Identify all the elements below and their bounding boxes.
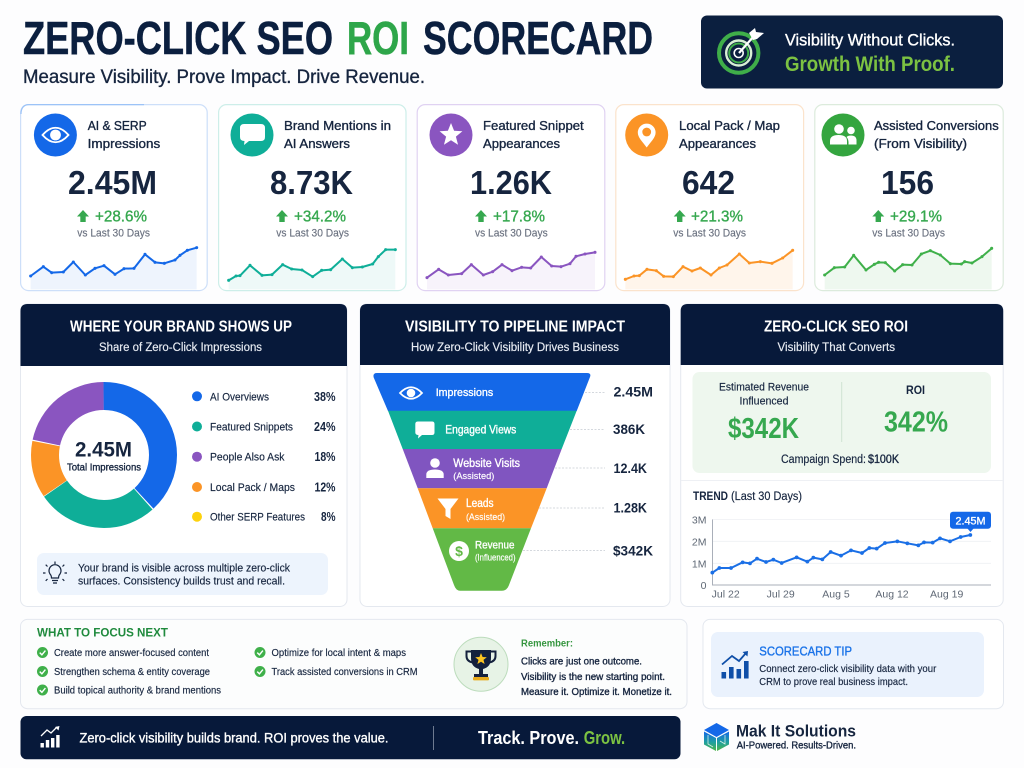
trend line chart: 0	[701, 580, 707, 592]
panel: scorecard tip	[703, 619, 1004, 709]
ROI summary box: 342%	[884, 407, 948, 439]
panel: brand mentions card: 8.73K	[270, 164, 353, 201]
banner: visibility without clicks: Visibility Without Clicks.	[785, 31, 955, 50]
panel: local pack card: Local Pack / Map	[679, 118, 780, 133]
panel: scorecard tip: SCORECARD TIP	[759, 643, 852, 658]
panel: local pack card	[616, 105, 804, 291]
icon: star	[430, 114, 472, 156]
callout: consistency note	[37, 553, 328, 595]
legend: Local Pack / Maps	[210, 482, 295, 494]
title: ROI	[347, 12, 409, 64]
icon: people	[822, 114, 864, 156]
ROI summary box: Estimated Revenue	[719, 382, 809, 394]
panel: AI and SERP impressions card: vs Last 30 Days	[77, 228, 150, 240]
funnel stage: website visits	[403, 449, 562, 488]
funnel stage: engaged views	[388, 411, 577, 449]
icon: chat bubble	[230, 114, 274, 156]
checklist: Create more answer-focused content	[54, 648, 209, 659]
title: ZERO-CLICK SEO	[23, 12, 333, 64]
legend	[192, 390, 336, 524]
panel: brand mentions card: +34.2%	[294, 209, 346, 226]
logo: Mak It Solutions: AI-Powered. Results-Driven.	[737, 740, 856, 752]
panel: local pack card: 642	[682, 164, 735, 201]
icon: map pin	[625, 114, 668, 156]
panel header	[360, 304, 670, 365]
callout: consistency note: surfaces. Consistency builds trust and recall.	[78, 576, 285, 588]
trend heading: TREND	[693, 491, 728, 503]
funnel stage: revenue	[433, 528, 531, 591]
icon: target with arrow	[719, 28, 764, 73]
panel: local pack card: +21.3%	[691, 209, 743, 226]
subtitle: Measure Visibility. Prove Impact. Drive Revenue.	[23, 66, 425, 88]
funnel stage: leads	[418, 488, 547, 528]
icon: bars and trend	[40, 726, 60, 748]
panel: local pack card: Appearances	[679, 136, 756, 151]
callout: 2.45M: 2.45M	[956, 515, 986, 527]
panel: assisted conversions card: vs Last 30 Days	[872, 228, 945, 240]
panel header: ZERO-CLICK SEO ROI	[764, 319, 908, 336]
panel: featured snippet card: Featured Snippet	[483, 118, 584, 133]
panel: assisted conversions card: 156	[881, 164, 934, 201]
callout: consistency note: Your brand is visible across multiple zero-click	[78, 563, 290, 575]
panel: scorecard tip: Connect zero-click visibility data with your	[759, 663, 937, 675]
panel: brand mentions card: vs Last 30 Days	[276, 228, 349, 240]
funnel chart	[373, 373, 590, 591]
funnel values: 386K	[613, 421, 645, 437]
funnel stage: leads: (Assisted)	[466, 512, 505, 523]
panel: brand mentions card: Brand Mentions in	[284, 118, 391, 133]
panel: where your brand shows up	[20, 304, 347, 606]
remember note: Remember:	[521, 639, 573, 650]
callout: 2.45M	[950, 512, 991, 532]
panel header: Visibility That Converts	[778, 342, 895, 354]
funnel stage: revenue: $	[455, 543, 463, 559]
funnel stage: website visits: (Assisted)	[453, 471, 494, 482]
legend: 24%	[314, 420, 336, 434]
panel header	[20, 304, 347, 366]
panel header	[681, 304, 1003, 365]
ROI summary box: ROI	[906, 385, 925, 397]
footer banner: Zero-click visibility builds brand. ROI proves the value.	[80, 730, 388, 745]
remember note: Measure it. Optimize it. Monetize it.	[521, 687, 672, 698]
title: SCORECARD	[423, 12, 653, 64]
panel: AI and SERP impressions card: AI & SERP	[88, 118, 147, 133]
remember note: Clicks are just one outcome.	[521, 657, 642, 668]
icon: light bulb	[43, 562, 67, 583]
panel header: VISIBILITY TO PIPELINE IMPACT	[405, 319, 625, 336]
panel: featured snippet card: +17.8%	[493, 209, 545, 226]
sparkline	[625, 250, 793, 289]
logo: Mak It Solutions	[704, 722, 856, 752]
legend: Featured Snippets	[210, 422, 293, 434]
trend line chart: Aug 19	[930, 589, 963, 601]
panel header: How Zero-Click Visibility Drives Business	[411, 342, 619, 354]
trend line chart: Jul 29	[767, 589, 795, 601]
icon: trophy	[454, 637, 508, 691]
funnel values: 12.4K	[614, 460, 647, 476]
donut chart: 2.45M	[75, 439, 132, 462]
panel header: Share of Zero-Click Impressions	[99, 342, 262, 354]
legend: Other SERP Features	[210, 512, 305, 524]
funnel stage: impressions	[373, 373, 590, 411]
checklist: Track assisted conversions in CRM	[272, 667, 418, 678]
trend line chart: 1M	[692, 558, 706, 570]
trend line chart: Aug 12	[875, 589, 909, 601]
panel: AI and SERP impressions card: 2.45M	[68, 164, 157, 201]
sparkline	[31, 248, 197, 289]
trend heading: (Last 30 Days)	[731, 491, 802, 503]
trend line chart: Aug 5	[822, 589, 850, 601]
donut chart: Total Impressions	[67, 462, 141, 474]
panel: brand mentions card: AI Answers	[284, 136, 351, 151]
funnel values	[523, 384, 653, 558]
trend line chart: 3M	[692, 514, 706, 526]
banner: visibility without clicks: Growth With Proof.	[785, 53, 955, 76]
funnel stage: website visits: Website Visits	[453, 458, 520, 470]
funnel stage: revenue: (Influenced)	[475, 553, 516, 563]
checklist: Optimize for local intent & maps	[272, 648, 406, 659]
panel: scorecard tip: CRM to prove real business impact.	[759, 676, 908, 688]
sparkline	[229, 250, 395, 289]
checklist: Strengthen schema & entity coverage	[54, 667, 210, 678]
legend: 8%	[321, 510, 336, 524]
panel: assisted conversions card: Assisted Conversions	[874, 118, 999, 133]
funnel stage: impressions: Impressions	[436, 387, 494, 399]
panel: what to focus next	[20, 619, 687, 709]
funnel stage: engaged views: Engaged Views	[445, 422, 516, 436]
footer banner: Track. Prove.	[478, 728, 579, 748]
panel: AI and SERP impressions card: Impressions	[88, 136, 161, 151]
panel: featured snippet card: Appearances	[483, 136, 560, 151]
panel: featured snippet card	[417, 105, 605, 291]
panel: brand mentions card	[219, 105, 406, 291]
funnel values: 1.28K	[614, 500, 647, 516]
funnel stage: leads: Leads	[466, 498, 494, 510]
footer banner: Grow.	[584, 728, 625, 748]
panel: assisted conversions card: (From Visibility)	[874, 136, 967, 151]
ROI summary box: Influenced	[740, 396, 788, 408]
checklist	[37, 647, 418, 697]
icon: eye	[34, 114, 77, 156]
trend line chart: 2M	[692, 536, 706, 548]
trend line chart	[692, 512, 991, 601]
legend: 12%	[314, 480, 336, 494]
funnel values: $342K	[613, 542, 653, 558]
ROI summary box: $100K	[868, 454, 899, 466]
panel: assisted conversions card: +29.1%	[890, 209, 942, 226]
legend: People Also Ask	[210, 452, 285, 464]
trend line chart: Jul 22	[712, 589, 740, 601]
panel: assisted conversions card	[815, 105, 1003, 291]
panel: local pack card: vs Last 30 Days	[673, 228, 746, 240]
legend: 18%	[314, 450, 336, 464]
trend heading	[693, 491, 802, 503]
legend: 38%	[314, 390, 336, 404]
panel: visibility to pipeline impact	[360, 304, 670, 606]
banner: visibility without clicks	[701, 16, 1003, 88]
panel header: WHERE YOUR BRAND SHOWS UP	[70, 319, 292, 336]
ROI summary box	[692, 372, 991, 473]
icon: cube	[704, 723, 729, 751]
remember note: Visibility is the new starting point.	[521, 672, 665, 683]
funnel stage: revenue: Revenue	[475, 540, 514, 552]
title	[23, 12, 653, 64]
sparkline	[427, 252, 595, 289]
panel: featured snippet card: vs Last 30 Days	[475, 228, 548, 240]
icon: growth chart	[722, 651, 749, 678]
funnel values: 2.45M	[614, 384, 653, 400]
legend: AI Overviews	[210, 391, 269, 403]
panel: AI and SERP impressions card	[21, 105, 207, 291]
panel: what to focus next: WHAT TO FOCUS NEXT	[37, 625, 169, 639]
footer banner	[20, 716, 680, 759]
panel: AI and SERP impressions card: +28.6%	[95, 209, 147, 226]
panel: featured snippet card: 1.26K	[470, 164, 552, 201]
ROI summary box: $342K	[728, 413, 799, 445]
ROI summary box: Campaign Spend:	[781, 454, 866, 466]
panel: zero-click SEO ROI	[681, 304, 1003, 606]
checklist: Build topical authority & brand mentions	[54, 686, 221, 697]
remember note	[521, 639, 672, 698]
sparkline	[825, 248, 992, 289]
donut chart	[45, 396, 163, 514]
logo: Mak It Solutions: Mak It Solutions	[736, 722, 856, 741]
